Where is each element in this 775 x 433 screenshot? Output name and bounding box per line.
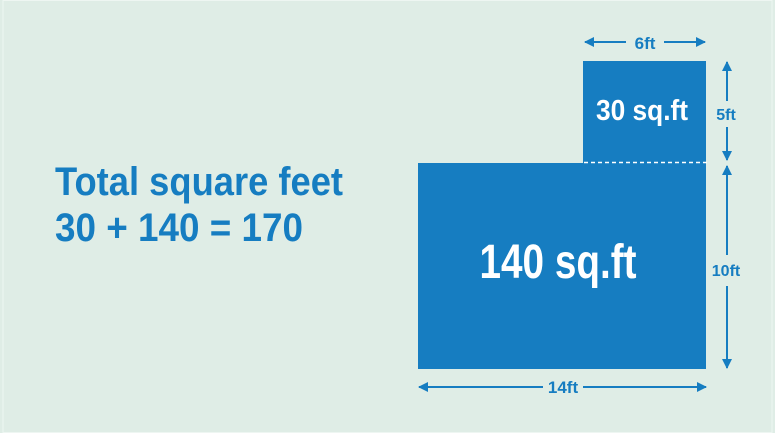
arrow: 6ft: 6ft bbox=[635, 34, 656, 53]
arrow: 5ft: 5ft bbox=[716, 107, 736, 124]
small rectangle: 30 sq.ft: 30 sq.ft bbox=[596, 95, 688, 127]
arrow: 14ft: 14ft bbox=[548, 378, 578, 397]
arrow: 10ft: 10ft bbox=[712, 263, 741, 280]
arrow: 5ft bbox=[716, 62, 736, 160]
title: Total square feet bbox=[55, 160, 343, 204]
title bbox=[55, 160, 343, 250]
large rectangle: 140 sq.ft bbox=[418, 163, 706, 369]
small rectangle: 30 sq.ft bbox=[583, 61, 706, 163]
title: 30 + 140 = 170 bbox=[55, 206, 303, 250]
large rectangle: 140 sq.ft: 140 sq.ft bbox=[480, 236, 637, 289]
arrow: 6ft bbox=[585, 34, 705, 53]
